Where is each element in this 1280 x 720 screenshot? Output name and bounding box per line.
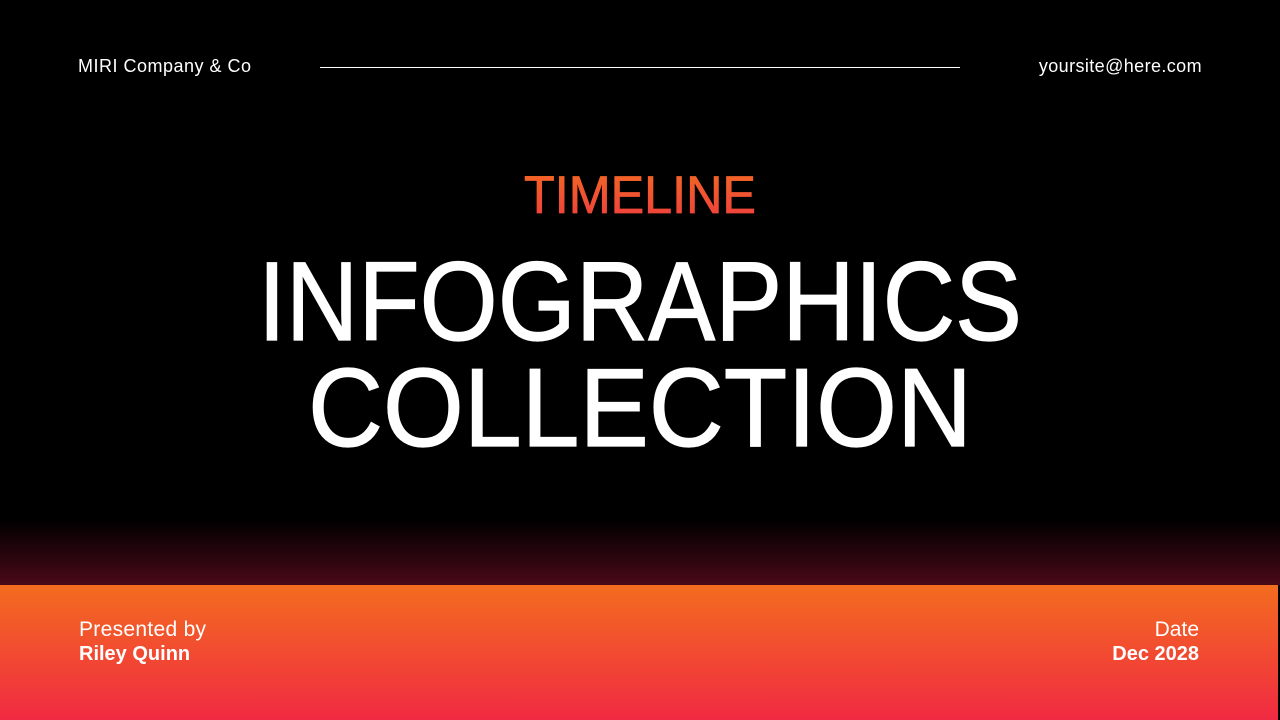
- footer band: [0, 585, 1278, 720]
- date: Dec 2028: [1112, 643, 1199, 665]
- presenter: Presented by: [79, 618, 206, 641]
- header: website: yoursite@here.com: [1039, 56, 1202, 76]
- title block: [258, 166, 1022, 470]
- glow above footer band: [0, 520, 1280, 585]
- header rule: [320, 67, 960, 68]
- date: Date: [1155, 618, 1199, 641]
- presenter: [79, 618, 206, 665]
- presenter: Riley Quinn: [79, 643, 190, 665]
- title line 2: COLLECTION: [308, 346, 972, 470]
- date: [1112, 618, 1199, 665]
- subtitle: TIMELINE: TIMELINE: [524, 166, 756, 225]
- title line 1: INFOGRAPHICS: [258, 239, 1022, 364]
- header: company name: MIRI Company & Co: [78, 56, 252, 76]
